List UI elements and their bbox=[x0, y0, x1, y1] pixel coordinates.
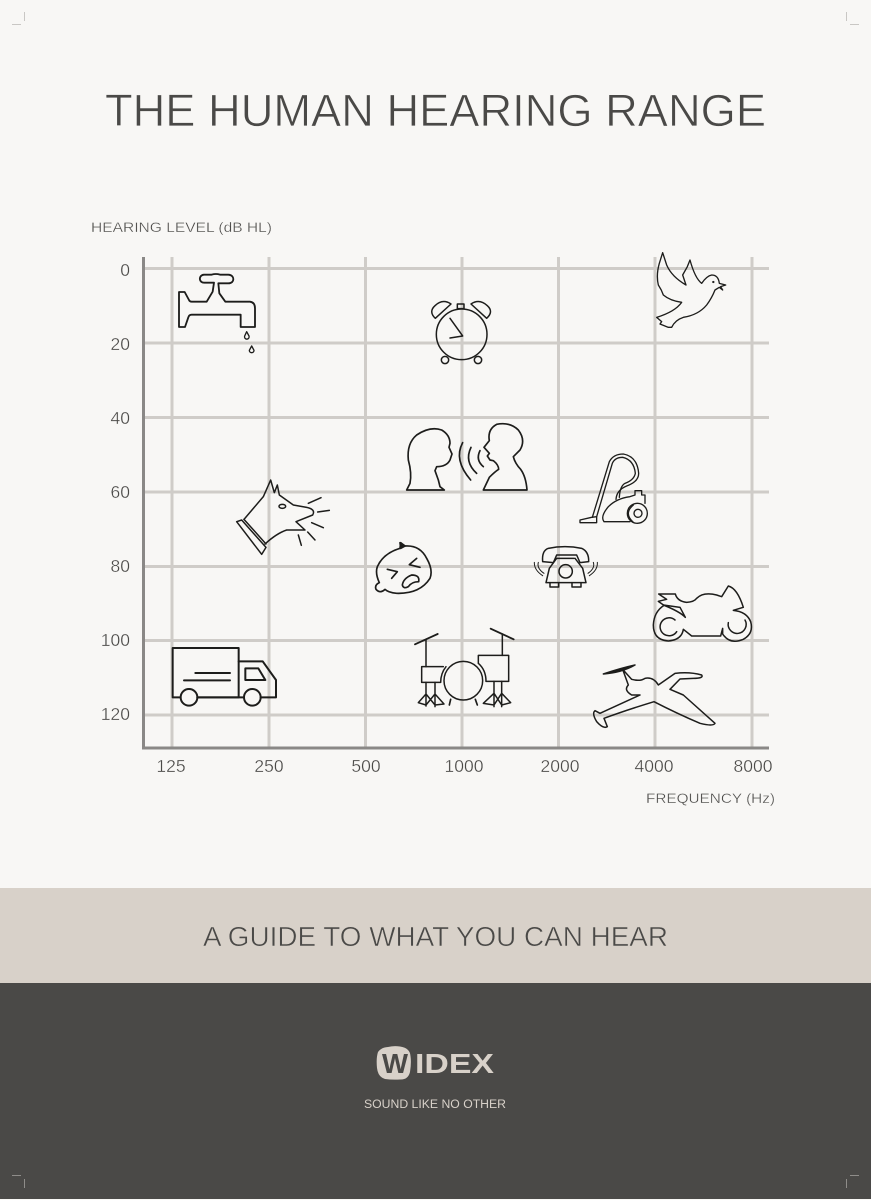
footer panel bbox=[0, 983, 871, 1199]
y axis labels: 40 bbox=[111, 408, 130, 428]
y axis labels: 120 bbox=[101, 704, 130, 724]
icon: barking dog bbox=[237, 480, 329, 554]
y axis labels: 80 bbox=[111, 556, 130, 576]
y axis labels: 0 bbox=[120, 260, 130, 280]
x axis labels: 4000 bbox=[635, 756, 674, 776]
icon: motorcycle bbox=[653, 586, 751, 641]
icon: drum kit bbox=[415, 629, 514, 707]
icon: delivery truck bbox=[173, 648, 276, 706]
logo: Widex bbox=[377, 1046, 494, 1080]
x axis labels: 500 bbox=[351, 756, 381, 776]
y axis title: HEARING LEVEL (dB HL) bbox=[91, 220, 272, 235]
x axis labels: 1000 bbox=[445, 756, 484, 776]
tagline: SOUND LIKE NO OTHER bbox=[364, 1099, 506, 1111]
logo: Widex: IDEX bbox=[415, 1048, 494, 1079]
y axis labels: 20 bbox=[111, 334, 130, 354]
logo: Widex: W bbox=[382, 1048, 409, 1079]
female head bbox=[407, 429, 452, 490]
icon: dripping tap bbox=[179, 274, 255, 353]
x axis labels: 8000 bbox=[734, 756, 773, 776]
x axis labels bbox=[156, 756, 773, 776]
icon: bird bbox=[657, 253, 726, 327]
y axis labels: 60 bbox=[111, 482, 130, 502]
title: THE HUMAN HEARING RANGE bbox=[105, 85, 766, 136]
x axis labels: 125 bbox=[156, 756, 186, 776]
male head bbox=[483, 424, 527, 490]
icon: vacuum cleaner bbox=[580, 454, 647, 523]
icon: people talking bbox=[407, 424, 527, 490]
icon: telephone bbox=[534, 547, 597, 587]
band: subtitle bbox=[0, 888, 871, 983]
icon: airplane bbox=[594, 665, 715, 727]
subtitle text: A GUIDE TO WHAT YOU CAN HEAR bbox=[203, 921, 668, 952]
x axis labels: 2000 bbox=[541, 756, 580, 776]
y axis labels: 100 bbox=[101, 630, 130, 650]
x axis labels: 250 bbox=[254, 756, 284, 776]
y axis labels bbox=[101, 260, 130, 724]
icon: alarm clock bbox=[432, 302, 491, 364]
sound waves bbox=[459, 443, 483, 480]
x axis title: FREQUENCY (Hz) bbox=[646, 791, 775, 806]
icon: crying baby bbox=[376, 543, 431, 593]
chart grid and axes bbox=[143, 257, 769, 748]
